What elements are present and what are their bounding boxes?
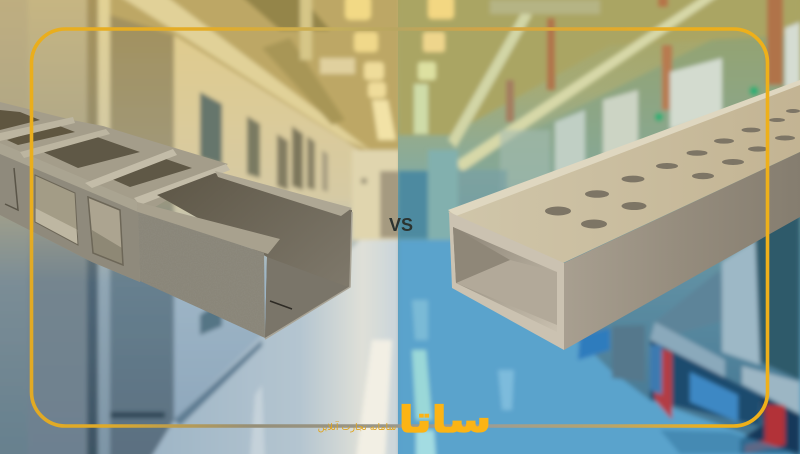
- steel tray back flange: [215, 171, 352, 216]
- steel tray floor: [265, 257, 348, 337]
- logo: سامانه تجارت آنلاین: [318, 420, 396, 433]
- plastic tray holes: [545, 109, 800, 228]
- plastic tray raised lip: [448, 80, 800, 216]
- plastic tray side face: [564, 152, 800, 350]
- label: VS: VS: [389, 215, 413, 235]
- plastic tray top face: [448, 83, 800, 263]
- plastic tray front opening: [449, 212, 564, 350]
- background: right cool corridor: [398, 0, 800, 454]
- panel: perforated plastic cable tray: [448, 80, 800, 350]
- steel tray interior: [157, 173, 352, 338]
- background: left warm corridor: [0, 0, 400, 454]
- steel tray side face: [138, 210, 265, 338]
- panel: steel ladder-style cable tray: [0, 102, 352, 339]
- steel tray ladder section: [0, 102, 230, 282]
- logo: ساتا: [399, 400, 491, 441]
- logo: [318, 400, 491, 441]
- steel tray front flange: [137, 202, 280, 254]
